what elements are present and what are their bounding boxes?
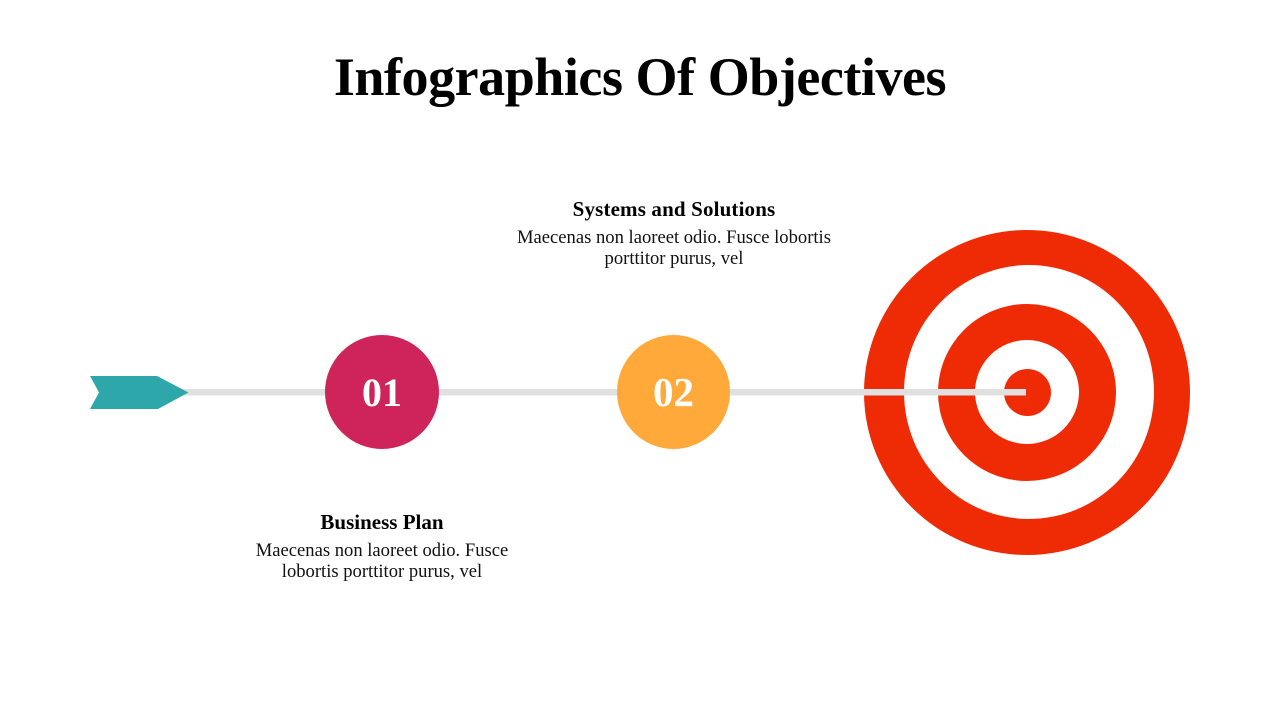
text block: systems and solutions: porttitor purus, vel	[605, 248, 743, 269]
icon: target	[864, 230, 1190, 555]
text block: systems and solutions: Maecenas non laoreet odio. Fusce lobortis	[517, 227, 831, 248]
title: Infographics Of Objectives	[334, 47, 946, 107]
marker 02: 02	[653, 369, 694, 415]
marker 01: 01	[362, 370, 402, 415]
text block: business plan: Business Plan	[320, 510, 444, 534]
arrow shaft	[180, 389, 1026, 396]
text block: systems and solutions: Systems and Solutions	[573, 197, 775, 221]
text block: business plan: lobortis porttitor purus, vel	[282, 561, 482, 582]
text block: business plan: Maecenas non laoreet odio. Fusce	[256, 540, 508, 561]
text block: systems and solutions	[517, 197, 831, 269]
arrow head	[90, 376, 188, 409]
marker 02	[617, 335, 730, 449]
marker 01	[325, 335, 439, 449]
text block: business plan	[256, 510, 508, 582]
